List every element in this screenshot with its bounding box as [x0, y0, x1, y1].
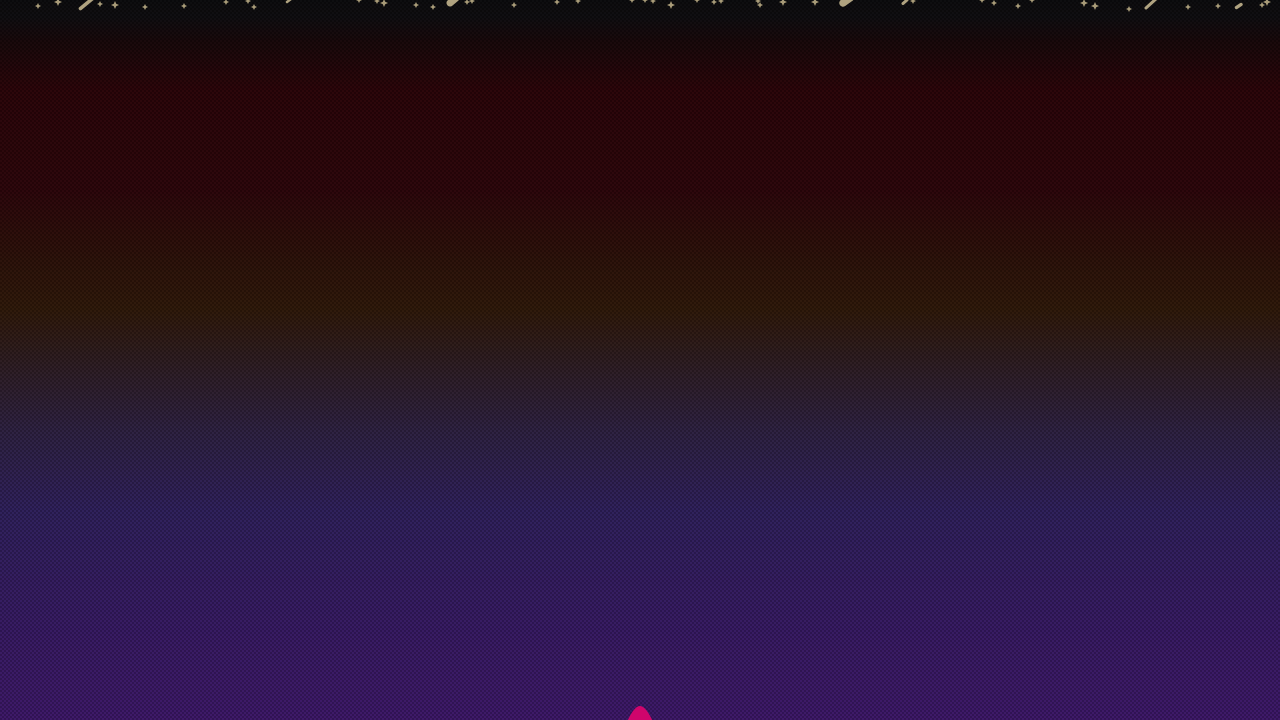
- pink peak at the bottom centre: [627, 706, 653, 720]
- stars along the top edge: [35, 0, 1271, 12]
- shooting stars: [80, 0, 1241, 8]
